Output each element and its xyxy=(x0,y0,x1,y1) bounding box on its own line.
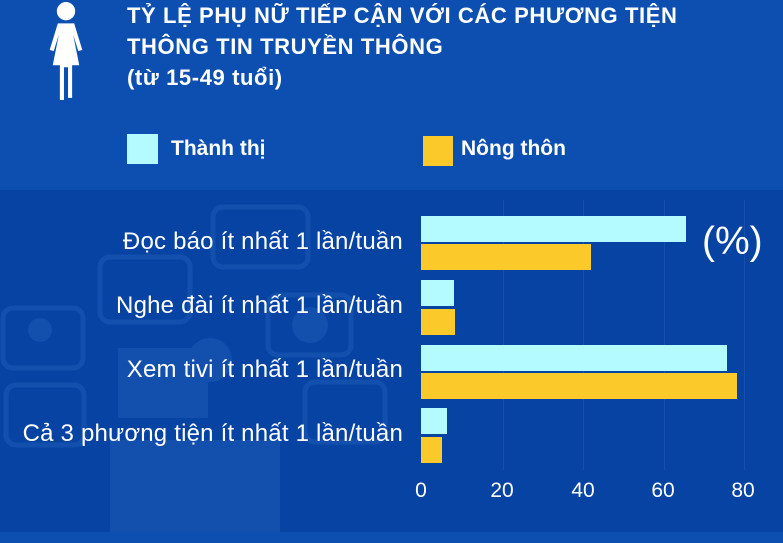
title xyxy=(127,3,678,90)
title: TỶ LỆ PHỤ NỮ TIẾP CẬN VỚI CÁC PHƯƠNG TIỆN xyxy=(127,3,678,28)
title: (từ 15-49 tuổi) xyxy=(127,65,283,90)
legend: Nông thôn: Nông thôn xyxy=(461,137,566,160)
legend: Thành thị: Thành thị xyxy=(171,137,265,160)
title: THÔNG TIN TRUYỀN THÔNG xyxy=(127,34,443,59)
text: Nghe đài ít nhất 1 lần/tuần xyxy=(116,292,403,319)
bottom strip xyxy=(0,532,783,543)
text: 60 xyxy=(651,479,675,502)
header panel xyxy=(0,0,783,190)
text: Cả 3 phương tiện ít nhất 1 lần/tuần xyxy=(23,420,403,447)
axis ticks: 0 xyxy=(415,479,427,502)
legend: Thành thị xyxy=(127,134,265,164)
icon: woman xyxy=(50,2,82,100)
text: 20 xyxy=(490,479,514,502)
unit label: (%) xyxy=(702,220,763,263)
background illustration xyxy=(0,204,388,532)
bar chart xyxy=(503,200,745,470)
category labels: Đọc báo ít nhất 1 lần/tuần xyxy=(123,228,403,255)
text: Xem tivi ít nhất 1 lần/tuần xyxy=(127,356,403,383)
legend: Nông thôn xyxy=(423,136,566,166)
text: 40 xyxy=(571,479,595,502)
text: 80 xyxy=(731,479,755,502)
